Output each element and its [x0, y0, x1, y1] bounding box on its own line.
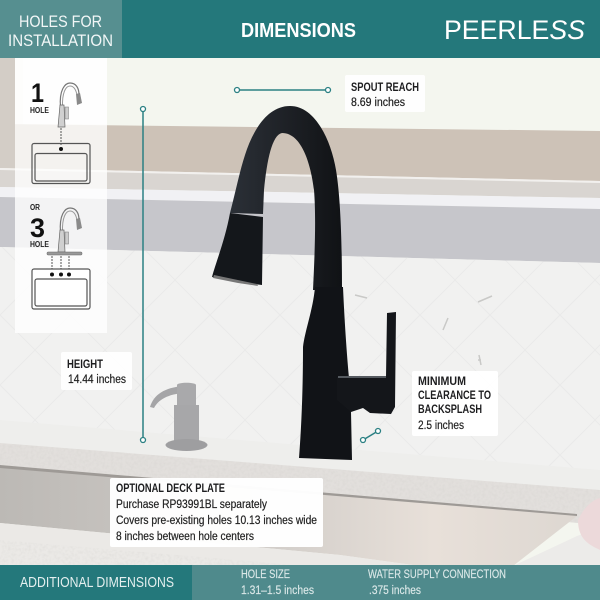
icon: one hole faucet and sink: 1	[31, 78, 44, 108]
faucet body	[299, 287, 352, 460]
hole size: 1.31–1.5 inches	[241, 585, 314, 597]
logo: peerless: PEERLESS	[444, 15, 585, 45]
callout: minimum clearance	[412, 371, 498, 436]
callout: spout reach: SPOUT REACH	[351, 82, 419, 94]
icon: three hole faucet and sink: HOLE	[30, 240, 50, 249]
heading: holes for installation: HOLES FOR	[19, 12, 102, 31]
hole size: HOLE SIZE	[241, 569, 290, 581]
footer heading: ADDITIONAL DIMENSIONS	[20, 575, 174, 591]
callout: height: 14.44 inches	[68, 374, 126, 386]
heading: holes for installation: INSTALLATION	[8, 31, 113, 50]
clearance arrow	[360, 428, 380, 442]
water supply connection: .375 inches	[369, 585, 421, 597]
callout: minimum clearance: MINIMUM	[418, 376, 466, 388]
callout: height: HEIGHT	[67, 359, 103, 371]
soap dispenser	[150, 383, 208, 451]
spout	[230, 106, 342, 290]
callout: minimum clearance: CLEARANCE TO	[418, 390, 491, 402]
lever handle	[337, 312, 396, 414]
icon: three hole faucet and sink	[30, 203, 90, 309]
callout: minimum clearance: 2.5 inches	[418, 420, 464, 432]
footer bar	[0, 565, 600, 600]
icon: three hole faucet and sink: OR	[30, 203, 40, 212]
icon: one hole faucet and sink	[30, 78, 90, 184]
callout: optional deck plate: 8 inches between hole centers	[116, 531, 254, 543]
panel: holes for installation	[15, 58, 107, 333]
spout reach arrow	[234, 88, 330, 92]
callout: spout reach: 8.69 inches	[351, 97, 405, 109]
water supply connection	[368, 569, 506, 597]
icon: one hole faucet and sink: HOLE	[30, 106, 50, 115]
callout: minimum clearance: BACKSPLASH	[418, 404, 482, 416]
height arrow	[140, 106, 146, 442]
icon: three hole faucet and sink: 3	[30, 213, 45, 243]
callout: optional deck plate	[110, 478, 323, 547]
water supply connection: WATER SUPPLY CONNECTION	[368, 569, 506, 581]
callout: spout reach	[345, 75, 425, 112]
callout: optional deck plate: Purchase RP93991BL separately	[116, 499, 267, 511]
pull-down spray head	[212, 213, 263, 285]
hole size	[241, 569, 314, 597]
callout: optional deck plate: OPTIONAL DECK PLATE	[116, 483, 225, 495]
callout: height	[61, 352, 132, 390]
callout: optional deck plate: Covers pre-existing holes 10.13 inches wide	[116, 515, 317, 527]
heading: holes for installation	[8, 12, 113, 50]
header bar	[0, 0, 600, 58]
faucet	[212, 106, 396, 460]
title: dimensions: DIMENSIONS	[241, 20, 356, 42]
